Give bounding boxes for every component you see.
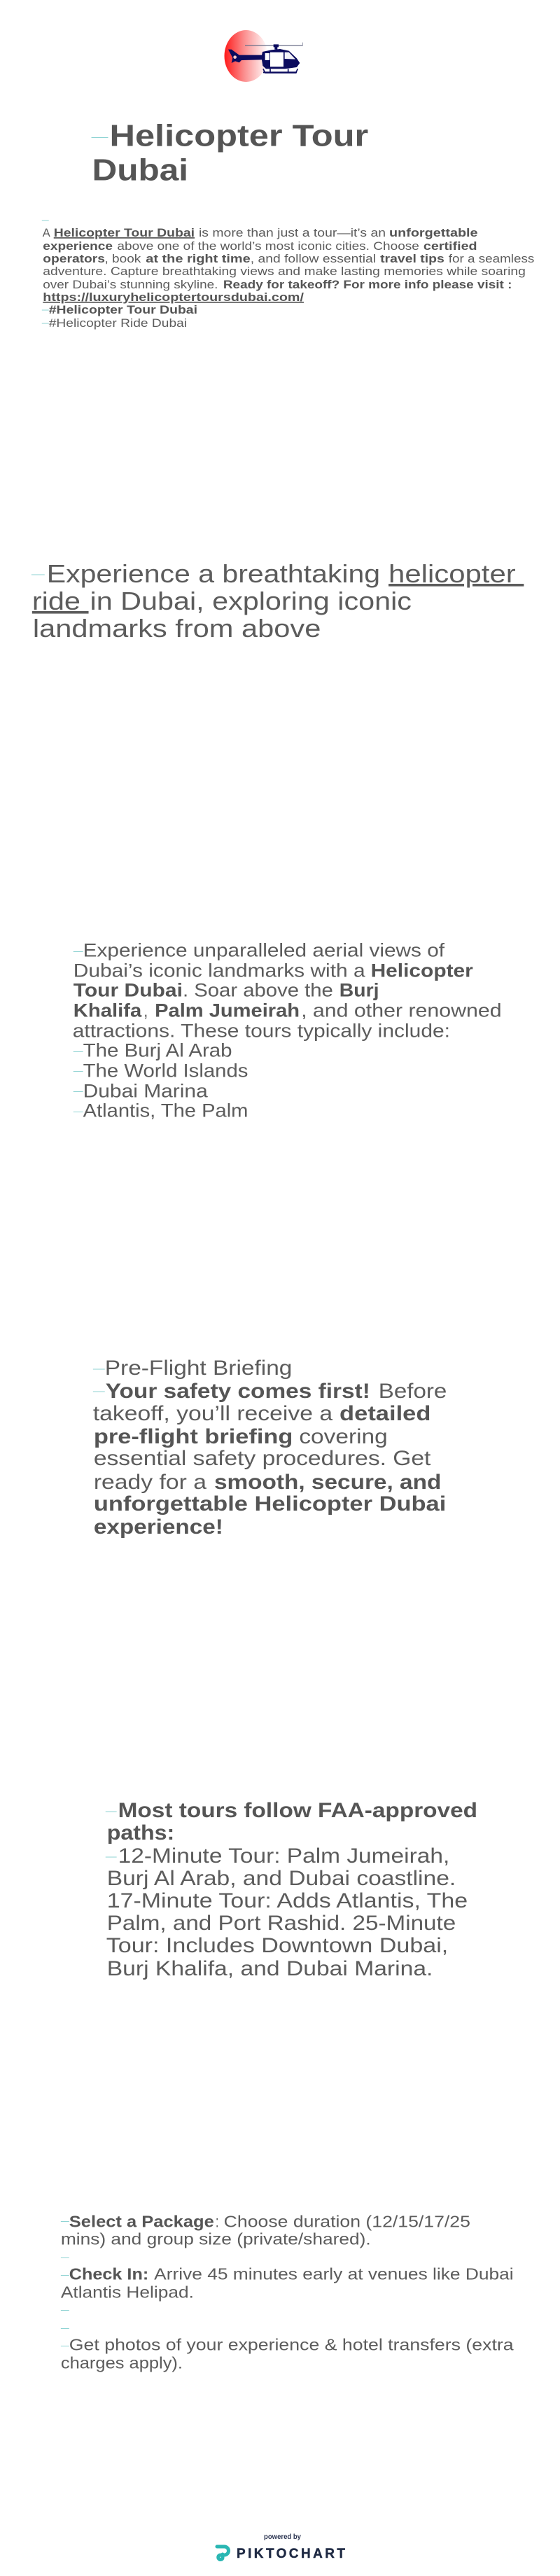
text block: introduction: above one of the world’s most iconic cities. Choose xyxy=(117,239,419,253)
text block: pre-flight briefing xyxy=(93,1357,447,1539)
heading: experience a breathtaking ride: ride xyxy=(32,587,89,615)
text block: introduction: is more than just a tour—it’s an xyxy=(199,226,386,239)
text block: introduction: #Helicopter Ride Dubai xyxy=(49,316,187,330)
text block: booking steps: Choose duration (12/15/17/25 xyxy=(224,2212,470,2231)
text block: booking steps xyxy=(61,2212,514,2372)
title: Dubai xyxy=(92,153,188,188)
text block: introduction: unforgettable xyxy=(389,226,478,239)
text block: FAA-approved paths: paths: xyxy=(107,1821,174,1844)
text block: aerial views and landmarks list: , and other renowned xyxy=(301,1000,502,1021)
text block: aerial views and landmarks list: , xyxy=(144,1000,148,1021)
footer: powered by Piktochart: powered by xyxy=(264,2533,301,2541)
text block: pre-flight briefing: Pre-Flight Briefing xyxy=(105,1357,292,1380)
text block: aerial views and landmarks list: Helicopter xyxy=(371,960,473,981)
text block: aerial views and landmarks list: Atlantis, The Palm xyxy=(83,1100,248,1121)
text block: pre-flight briefing: Your safety comes first! xyxy=(106,1380,370,1403)
icon: helicopter logo xyxy=(224,30,303,82)
text block: pre-flight briefing: covering xyxy=(299,1425,388,1448)
text block: aerial views and landmarks list: Palm Jumeirah xyxy=(155,1000,300,1021)
text block: pre-flight briefing: unforgettable Helicopter Dubai xyxy=(94,1492,446,1516)
heading: experience a breathtaking ride: helicopter xyxy=(388,559,524,588)
text block: aerial views and landmarks list: attractions. These tours typically include: xyxy=(73,1020,450,1042)
text block: introduction: adventure. Capture breathtaking views and make lasting memories while soaring xyxy=(43,265,526,278)
text block: pre-flight briefing: pre-flight briefing xyxy=(94,1425,293,1448)
text block: FAA-approved paths: Burj Khalifa, and Dubai Marina. xyxy=(107,1957,433,1980)
text block: booking steps: Get photos of your experience & hotel transfers (extra xyxy=(69,2335,514,2354)
text block: introduction: travel tips xyxy=(380,252,444,265)
text block: introduction: over Dubai’s stunning skyline. xyxy=(43,278,218,291)
text block: booking steps: : xyxy=(216,2212,219,2231)
text block: booking steps: Atlantis Helipad. xyxy=(61,2283,194,2302)
heading: experience a breathtaking ride: landmarks from above xyxy=(33,614,321,643)
text block: introduction: at the right time xyxy=(146,252,251,265)
text block: FAA-approved paths: Palm, and Port Rashid. 25-Minute xyxy=(107,1912,456,1935)
text block: FAA-approved paths: Most tours follow FAA-approved xyxy=(118,1799,477,1822)
text block: introduction: Helicopter Tour Dubai xyxy=(54,226,195,239)
text block: introduction xyxy=(42,220,534,330)
text block: pre-flight briefing: Before xyxy=(379,1380,447,1403)
text block: introduction: #Helicopter Tour Dubai xyxy=(49,303,197,316)
text block: introduction: for a seamless xyxy=(449,252,534,265)
text block: FAA-approved paths: Tour: Includes Downtown Dubai, xyxy=(106,1934,448,1957)
text block: pre-flight briefing: essential safety procedures. Get xyxy=(94,1447,430,1470)
text block: FAA-approved paths: 12-Minute Tour: Palm Jumeirah, xyxy=(118,1844,449,1868)
text block: booking steps: mins) and group size (private/shared). xyxy=(61,2230,371,2248)
footer: powered by Piktochart: PIKTOCHART xyxy=(237,2547,345,2561)
text block: aerial views and landmarks list: Dubai Marina xyxy=(83,1080,208,1102)
text block: aerial views and landmarks list: Burj xyxy=(340,979,379,1001)
text block: FAA-approved paths: Burj Al Arab, and Dubai coastline. xyxy=(107,1867,456,1890)
text block: pre-flight briefing: takeoff, you’ll receive a xyxy=(93,1402,333,1425)
text block: FAA-approved paths: 17-Minute Tour: Adds Atlantis, The xyxy=(107,1889,468,1912)
text block: introduction: , book xyxy=(104,252,141,265)
text block: booking steps: Check In: xyxy=(69,2264,148,2283)
text block: booking steps: charges apply). xyxy=(61,2353,183,2372)
text block: pre-flight briefing: smooth, secure, and xyxy=(214,1471,441,1494)
text block: aerial views and landmarks list: The World Islands xyxy=(83,1060,248,1082)
text block: booking steps: Select a Package xyxy=(69,2212,214,2231)
text block: introduction: certified xyxy=(424,239,477,253)
text block: introduction: operators xyxy=(43,252,105,265)
icon: Piktochart logo mark xyxy=(217,2547,228,2559)
text block: aerial views and landmarks list: Khalifa xyxy=(74,1000,142,1021)
text block: introduction: A xyxy=(43,226,50,239)
text block: aerial views and landmarks list: Tour Dubai xyxy=(74,979,183,1001)
text block: aerial views and landmarks list: Dubai’s iconic landmarks with a xyxy=(74,960,365,981)
heading: experience a breathtaking ride: in Dubai, exploring iconic xyxy=(90,587,412,615)
title: Helicopter Tour xyxy=(109,118,368,153)
heading: experience a breathtaking ride: Experience a breathtaking xyxy=(47,559,380,588)
title xyxy=(92,118,368,188)
text block: aerial views and landmarks list xyxy=(73,939,502,1121)
text block: aerial views and landmarks list: . Soar above the xyxy=(183,979,333,1001)
text block: introduction: https://luxuryhelicoptertoursdubai.com/ xyxy=(43,290,304,304)
text block: introduction: Ready for takeoff? For more info please visit : xyxy=(223,278,512,291)
text block: aerial views and landmarks list: The Burj Al Arab xyxy=(83,1040,232,1061)
footer: powered by Piktochart xyxy=(217,2533,345,2561)
text block: booking steps: Arrive 45 minutes early at venues like Dubai xyxy=(154,2264,514,2283)
text block: introduction: experience xyxy=(43,239,113,253)
text block: pre-flight briefing: detailed xyxy=(340,1402,430,1425)
text block: introduction: , and follow essential xyxy=(251,252,376,265)
heading: experience a breathtaking ride xyxy=(31,559,524,643)
text block: pre-flight briefing: ready for a xyxy=(94,1471,207,1494)
text block: pre-flight briefing: experience! xyxy=(94,1516,223,1539)
text block: FAA-approved paths xyxy=(106,1799,477,1980)
text block: aerial views and landmarks list: Experience unparalleled aerial views of xyxy=(83,939,445,961)
